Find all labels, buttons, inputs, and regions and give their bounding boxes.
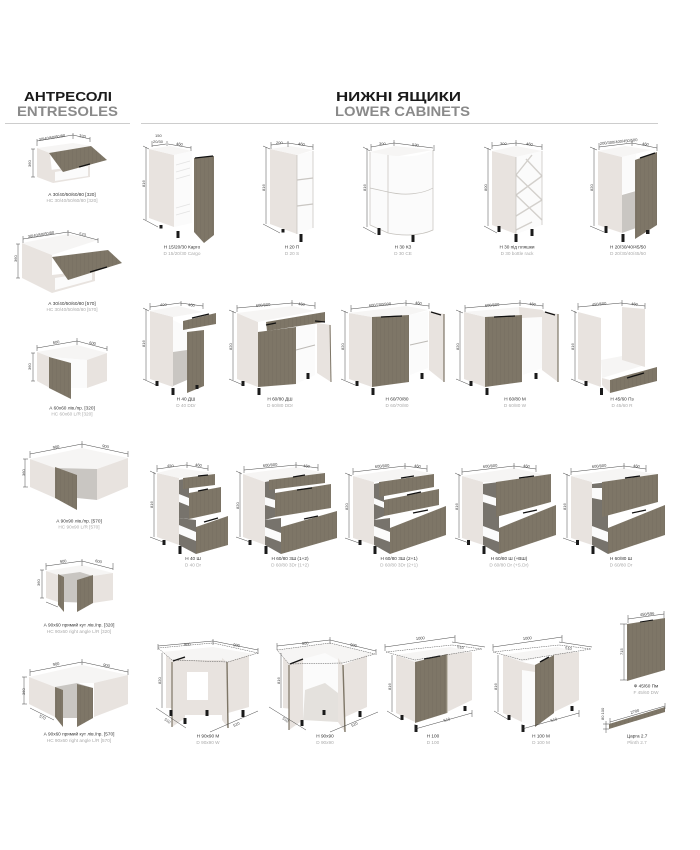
caption: D 30 bottle rack — [501, 251, 534, 256]
cabinet: H 60/80 dr — [562, 463, 665, 568]
panel: lower cabinets row 2 — [141, 300, 657, 408]
caption — [610, 244, 646, 256]
cabinet: H cargo: 150 — [155, 133, 162, 138]
cabinet: A 30-80 570: 570 — [79, 231, 87, 238]
caption — [627, 734, 648, 745]
cabinet: A 60x60 320: 600 — [89, 340, 97, 346]
cabinet: H 20 open: 816 — [261, 184, 266, 191]
cabinet: H 20-50 door — [589, 137, 657, 256]
panel: lower cabinets row 4 — [156, 611, 665, 745]
cabinet: H 60/70/80: 460 — [415, 300, 423, 306]
caption — [185, 556, 202, 568]
caption — [285, 244, 299, 256]
cabinet: H 30 bottle rack: 800 — [483, 184, 488, 191]
cabinet: H 20 open: 460 — [298, 141, 306, 147]
cabinet: H 90x90 M: 900 — [233, 642, 241, 648]
cabinet: A 90x60 570: 900 — [52, 661, 61, 667]
cabinet: A 90x60 320: 600 — [95, 558, 103, 565]
cabinet: H 40 drawer door — [141, 301, 216, 408]
caption: D 60/80 Dr — [610, 562, 633, 568]
panel: plinth: 2700 — [630, 707, 641, 715]
caption: D 40 Dr — [185, 562, 202, 568]
cabinet: H 60/80 drawer door: 600/800 — [256, 302, 271, 308]
caption: Н 90х90 М — [197, 734, 219, 738]
cabinet: H cargo: 460 — [176, 141, 184, 147]
caption: Н 40 ДШ — [177, 396, 195, 402]
caption: HC 90х60 right angle L/R [570] — [47, 738, 111, 743]
cabinet: H 100 M — [493, 635, 592, 745]
cabinet: H 90x90 M — [156, 639, 258, 745]
cabinet: H 100: 510 — [443, 716, 451, 723]
cabinet: H 60/80 3dr 2+1 — [344, 463, 446, 568]
cabinet: H 90x90: 900 — [350, 642, 358, 648]
panel: dishwasher facade: 450/596 — [640, 611, 655, 617]
cabinet: H 100: 510 — [457, 644, 465, 650]
cabinet: H 90x90: 816 — [276, 677, 281, 684]
caption — [49, 406, 95, 416]
caption: Царга 2.7 — [627, 734, 648, 738]
cabinet: H cargo — [141, 133, 214, 256]
cabinet: H 60/80 sink: 600/800 — [485, 302, 500, 308]
caption: Н 60/80 3Ш (1+2) — [272, 556, 309, 561]
cabinet: H 60/80 3dr 2+1: 820 — [344, 503, 349, 510]
cabinet: H 100 M: 510 — [565, 645, 573, 651]
cabinet: H 60/80 3dr 2+1: 600/800 — [375, 463, 390, 469]
caption — [633, 684, 659, 695]
cabinet: H 30 corner: 530 — [412, 142, 420, 148]
caption — [176, 396, 196, 408]
cabinet: A 90x60 570 — [21, 659, 128, 743]
cabinet: A 60x60 320: 360 — [27, 363, 32, 370]
cabinet: H 60/80 dr +inner: 460 — [523, 463, 531, 469]
cabinet: H cargo: 20/30 — [153, 139, 164, 144]
caption: HC 90х90 L/R [570] — [58, 524, 100, 530]
caption — [56, 518, 102, 530]
cabinet: A 90x90 570: 360 — [21, 469, 26, 476]
caption: Н 40 Ш — [185, 556, 201, 561]
cabinet: A 30-80 570 — [13, 230, 122, 312]
panel: entresoles column — [13, 133, 128, 743]
cabinet: A 90x90 570: 900 — [52, 444, 61, 450]
caption: D 60/70/80 — [386, 403, 409, 408]
cabinet: H 30 corner: 816 — [362, 184, 367, 191]
cabinet: H 20 open: 200 — [276, 140, 283, 145]
heading: entresoles: ENTRESOLES — [17, 103, 118, 119]
cabinet: A 90x60 570: 360 — [21, 688, 26, 695]
caption — [380, 556, 418, 568]
cabinet: H 20-50 door: 820 — [589, 184, 594, 191]
cabinet: H 60/70/80: 820 — [340, 343, 345, 350]
panel: lower cabinets row 3 — [149, 462, 665, 568]
caption: D 60/80 3Dr (2+1) — [380, 562, 418, 568]
panel: plinth: 80 100 — [600, 707, 605, 720]
caption: Н 60/70/80 — [386, 396, 409, 402]
caption — [196, 734, 220, 745]
caption: Н 15/20/30 Карго — [164, 244, 201, 250]
caption: А 30/40/50/60/80 [570] — [48, 301, 96, 306]
caption: Н 90х90 — [316, 734, 334, 738]
cabinet: H 60/80 3dr 1+2: 460 — [303, 463, 311, 469]
cabinet: H 30 corner: 300 — [379, 141, 386, 146]
caption: Н 60/80 М — [504, 396, 526, 402]
caption: D 15/20/30 Cargo — [163, 251, 201, 256]
cabinet: H 40 drawers: 816 — [149, 501, 154, 508]
cabinet: A 90x60 320 — [36, 558, 114, 634]
caption: D 100 M — [532, 740, 550, 745]
cabinet: H 30 bottle rack: 300 — [500, 141, 507, 146]
cabinet: H 90x90 — [269, 637, 378, 745]
cabinet: H 60/80 3dr 1+2 — [235, 462, 337, 568]
heading: lower cabinets — [335, 89, 470, 119]
caption: D 20/30/40/45/50 — [610, 251, 646, 256]
caption: D 60/80 Dr (+S.Dr) — [489, 562, 529, 568]
cabinet: H 60/80 dr: 816 — [562, 503, 567, 510]
caption: А 60х60 лів./пр. [320] — [49, 406, 95, 410]
caption — [46, 192, 98, 203]
heading: lower cabinets: НИЖНІ ЯЩИКИ — [336, 89, 461, 104]
caption — [532, 734, 550, 745]
caption — [394, 244, 412, 256]
cabinet: H 40 drawer door: 816 — [141, 340, 146, 347]
heading: entresoles — [17, 89, 118, 119]
cabinet: H 100 M: 1000 — [523, 635, 533, 641]
cabinet: A 30-80 570: 30/40/50/60/80 — [27, 230, 55, 239]
cabinet: H 20 open — [261, 140, 313, 256]
heading: lower cabinets: LOWER CABINETS — [335, 103, 470, 119]
cabinet: A 90x60 320: 360 — [36, 579, 41, 586]
cabinet: H 90x90: 510 — [350, 720, 359, 728]
cabinet: H 60/80 drawer door: 820 — [228, 343, 233, 350]
cabinet: H 60/80 dr: 460 — [633, 463, 641, 469]
cabinet: A 30-80 320: 360 — [27, 160, 32, 167]
caption: Н 60/80 Ш — [610, 556, 632, 561]
caption — [271, 556, 309, 568]
cabinet: H 60/80 dr: 600/800 — [592, 463, 607, 469]
caption: D 100 — [427, 740, 440, 745]
cabinet: A 60x60 320 — [27, 338, 107, 416]
cabinet: H cargo: 816 — [141, 180, 146, 187]
caption: F 45/60 DW — [633, 690, 659, 695]
caption — [267, 396, 293, 408]
caption: HC 90х60 right angle L/R [320] — [47, 629, 111, 634]
cabinet: A 30-80 320: 320 — [79, 133, 87, 139]
cabinet: H 100 M: 816 — [493, 683, 498, 690]
caption: HC 60х60 L/R [320] — [51, 412, 93, 416]
heading: entresoles: АНТРЕСОЛІ — [24, 89, 112, 104]
panel: plinth — [600, 703, 665, 745]
cabinet: H 90x90: 510 — [281, 716, 290, 724]
caption — [163, 244, 201, 256]
cabinet: H 90x90 M: 820 — [157, 677, 162, 684]
caption: HC 30/40/50/60/80 [320] — [46, 198, 98, 203]
caption: D 20 S — [285, 251, 299, 256]
caption: Н 100 — [427, 734, 440, 738]
caption: D 60/80 W — [504, 403, 527, 408]
cabinet: A 30-80 320 — [27, 133, 107, 203]
caption: Ф 45/60 Пм — [634, 684, 658, 688]
cabinet: H 60/80 sink: 820 — [455, 343, 460, 350]
caption — [386, 396, 409, 408]
caption: D 90х90 — [316, 740, 334, 745]
cabinet: H 90x90 M: 510 — [232, 720, 241, 728]
panel: dishwasher facade — [619, 611, 665, 695]
caption — [610, 556, 633, 568]
cabinet: H 40 drawer door: 460 — [188, 302, 196, 308]
cabinet: H 40 drawers — [149, 462, 228, 568]
cabinet: H 60/80 sink: 460 — [529, 301, 537, 307]
caption: D 40 DDr — [176, 403, 196, 408]
cabinet: H 90x90: 900 — [302, 640, 310, 646]
cabinet: A 30-80 570: 360 — [13, 255, 18, 262]
caption: А 90х90 лів./пр. [570] — [56, 518, 102, 524]
caption: Н 45/60 Пз — [610, 396, 634, 402]
cabinet: H 45/60 oven: 816 — [570, 343, 575, 350]
cabinet: H 60/70/80: 600/700/800 — [369, 301, 392, 308]
caption: Н 20 П — [285, 244, 299, 250]
caption: D 60/80 3Dr (1+2) — [271, 562, 309, 568]
caption: Plinth 2.7 — [627, 740, 647, 745]
cabinet: H 40 drawers: 450 — [167, 463, 174, 468]
cabinet: H 30 bottle rack — [483, 140, 542, 256]
cabinet: H 100 M: 510 — [550, 716, 558, 723]
cabinet: H 45/60 oven: 460 — [631, 301, 639, 307]
cabinet: H 60/80 dr +inner: 816 — [454, 503, 459, 510]
caption: D 90х90 W — [196, 740, 220, 745]
cabinet: H 30 bottle rack: 460 — [526, 141, 534, 147]
cabinet: H 90x90 M: 900 — [184, 641, 192, 647]
cabinet: H 20-50 door: 200/300/400/450/500 — [600, 137, 638, 146]
panel: lower cabinets row 1 — [141, 133, 657, 256]
cabinet: H 60/80 drawer door — [228, 300, 331, 408]
caption: Н 30 КЗ — [395, 244, 412, 250]
cabinet: H 45/60 oven — [570, 300, 657, 408]
cabinet: H 45/60 oven: 450/600 — [592, 301, 607, 307]
cabinet: H 90x90 M: 510 — [163, 717, 172, 725]
caption: D 60/80 DDr — [267, 403, 293, 408]
caption — [610, 396, 634, 408]
cabinet: H 30 corner — [362, 140, 434, 256]
caption — [504, 396, 527, 408]
caption: Н 60/80 Ш (+ВШ) — [491, 556, 528, 561]
cabinet: H 60/80 sink — [455, 300, 558, 408]
caption — [46, 301, 98, 312]
cabinet: A 30-80 320: 30/40/50/60/80 — [38, 133, 66, 142]
cabinet: A 90x60 570: 570 — [39, 713, 47, 721]
caption: Н 60/80 ДШ — [267, 396, 293, 402]
caption: Н 30 під пляшки — [499, 244, 535, 250]
caption: Н 100 М — [532, 734, 550, 738]
cabinet: H 100 — [385, 635, 485, 745]
cabinet: H 60/80 3dr 1+2: 820 — [235, 502, 240, 509]
cabinet: H 60/70/80 — [340, 300, 444, 408]
cabinet: H 60/80 dr +inner: 600/800 — [483, 463, 498, 469]
cabinet: H 40 drawers: 460 — [195, 462, 203, 468]
cabinet: H 60/80 drawer door: 460 — [298, 301, 306, 307]
cabinet: H 20-50 door: 460 — [642, 141, 650, 147]
caption — [489, 556, 529, 568]
cabinet: H 60/80 3dr 2+1: 460 — [414, 463, 422, 469]
caption — [44, 622, 114, 634]
caption: Н 60/80 3Ш (2+1) — [380, 556, 418, 561]
caption — [427, 734, 440, 745]
cabinet: A 90x90 570: 900 — [102, 443, 110, 450]
caption: HC 30/40/50/60/80 [570] — [46, 307, 98, 312]
caption — [499, 244, 535, 256]
cabinet: H 40 drawer door: 400 — [160, 302, 167, 307]
caption: D 45/60 R — [611, 403, 633, 408]
caption — [44, 730, 114, 743]
caption — [316, 734, 334, 745]
panel: dishwasher facade: 715 — [619, 648, 624, 655]
cabinet: H 60/80 3dr 1+2: 600/800 — [263, 462, 278, 468]
cabinet: H 60/80 dr +inner — [454, 463, 556, 568]
cabinet: A 90x90 570 — [21, 441, 128, 530]
caption: А 90х60 прямий кут лів./пр. [570] — [44, 730, 114, 736]
cabinet: H 100: 816 — [387, 683, 392, 690]
caption: А 30/40/50/60/80 [320] — [48, 192, 96, 197]
cabinet: A 90x60 320: 900 — [60, 558, 68, 564]
cabinet: A 90x60 570: 900 — [103, 662, 111, 669]
caption: D 30 CE — [394, 251, 412, 256]
caption: А 90х60 прямий кут лів./пр. [320] — [44, 622, 114, 628]
caption: Н 20/30/40/45/50 — [610, 244, 646, 250]
cabinet: A 60x60 320: 600 — [52, 339, 61, 345]
cabinet: H 100: 1000 — [416, 635, 426, 641]
